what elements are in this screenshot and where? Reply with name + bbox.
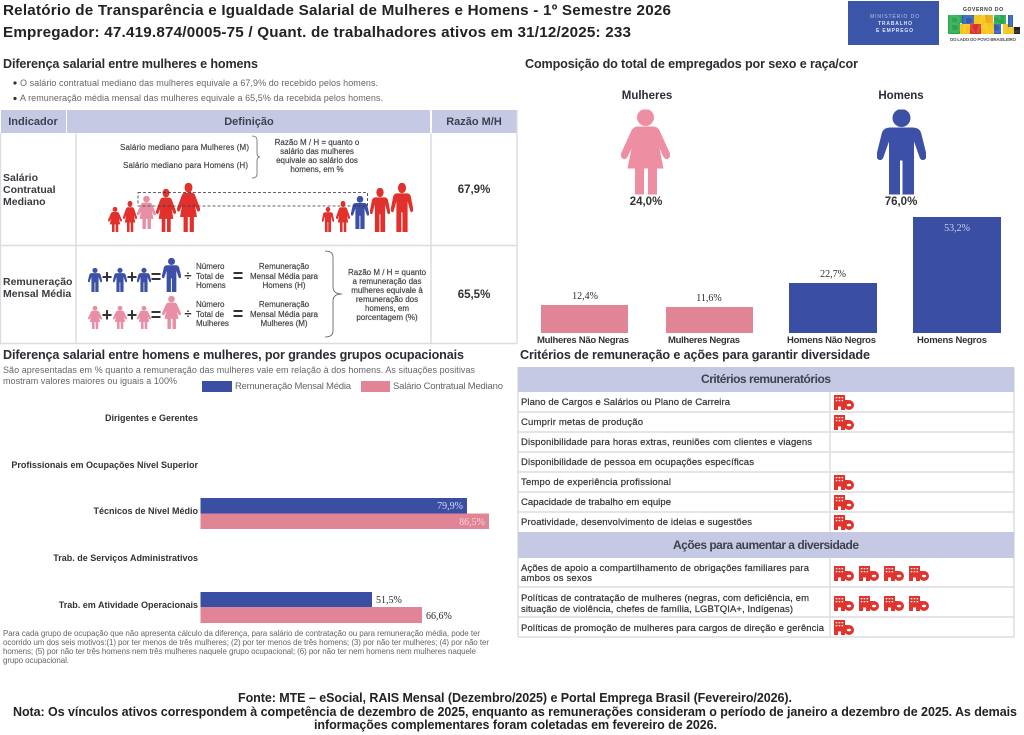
row label: remuneração mensal média: Mensal Média — [3, 288, 71, 300]
bar: homens não negros: 22,7% — [820, 269, 846, 280]
formula: men: Número — [196, 262, 225, 271]
formula: women: Mulheres (M) — [260, 319, 308, 328]
logo: Ministério do Trabalho e Emprego: TRABALHO — [878, 21, 912, 27]
row: proatividade — [521, 515, 854, 530]
row: contratação: situação de violência, chefes de família, LGBTQIA+, Indígenas) — [521, 604, 793, 615]
section header: critérios remuneratórios: Critérios remuneratórios — [701, 372, 831, 386]
formula: men: = — [151, 267, 161, 287]
footer: fonte e nota: informações complementares foram coletadas em fevereiro de 2026. — [314, 718, 717, 732]
logo: Ministério do Trabalho e Emprego: E EMPREGO — [876, 28, 913, 34]
footnote: homens; (5) por não ter três homens nem três mulheres naquele grupo ocupacional; (6) por não ter nem homens nem mulheres naquele — [3, 647, 477, 656]
row: metas — [521, 415, 854, 430]
formula: men: Homens — [196, 281, 226, 290]
definition text: salário mediano: Salário mediano para Homens (H) — [123, 161, 248, 170]
section header: critérios remuneratórios — [518, 367, 1014, 392]
definition text: salário mediano: Salário mediano para Mulheres (M) — [120, 143, 249, 152]
bracket and ratio definition: mulheres equivale à — [351, 286, 423, 295]
formula: men: Remuneração — [259, 262, 310, 271]
heading: composição: Composição do total de empregados por sexo e raça/cor — [525, 57, 858, 71]
heading: diferença salarial: Diferença salarial entre mulheres e homens — [3, 57, 258, 71]
pictogram: homens 76,0%: Homens — [878, 90, 924, 102]
formula: men: Mensal Média para — [250, 272, 319, 281]
bars: técnicos de nível médio: 86,5% — [459, 517, 485, 528]
bars: técnicos de nível médio: Técnicos de Nível Médio — [93, 506, 198, 516]
formula: women: Remuneração — [259, 300, 310, 309]
formula: men: ÷ — [184, 268, 192, 283]
logo: Governo do Brasil: GOVERNO DO — [963, 7, 1003, 13]
row label: salário contratual mediano: Salário — [3, 172, 38, 184]
legend: Remuneração Mensal Média — [235, 381, 352, 392]
row: obrigações familiares — [521, 563, 929, 584]
row label: salário contratual mediano: Mediano — [3, 196, 46, 208]
value: 67,9%: 67,9% — [458, 184, 490, 196]
bar: mulheres negras: Mulheres Negras — [668, 335, 740, 346]
bracket and ratio definition — [325, 251, 427, 337]
row: experiência — [521, 475, 854, 490]
text block: bullet points — [13, 78, 383, 103]
row: ocupações específicas: Disponibilidade de pessoa em ocupações específicas — [521, 457, 754, 468]
bar: homens negros: Homens Negros — [917, 335, 987, 346]
bracket and ratio definition: homens, em — [365, 304, 409, 313]
text block: chart description: São apresentadas em % quanto a remuneração das mulheres vale em relação à dos homens. As situações positivas — [3, 365, 476, 375]
bracket and ratio definition: porcentagem (%) — [356, 313, 418, 322]
row: obrigações familiares: Ações de apoio a compartilhamento de obrigações familiares para — [521, 563, 810, 574]
bar: homens negros: 53,2% — [944, 223, 970, 234]
footer: fonte e nota: Nota: Os vínculos ativos correspondem à competência de dezembro de 2025, enquanto as remunerações consideram o período de janeiro a dezembro de 2025. As demais — [13, 705, 1017, 719]
panel: indicator table — [0, 110, 517, 344]
table header: Razão M/H — [446, 116, 502, 128]
formula: men: + — [127, 267, 137, 287]
formula: men: = — [233, 266, 243, 286]
footnote: Para cada grupo de ocupação que não apresenta cálculo da diferença, para salário de contratação ou para remuneração média, pode ter — [3, 629, 480, 638]
row label: salário contratual mediano: Contratual — [3, 184, 56, 196]
heading: diferença por grupos ocupacionais: Diferença salarial entre homens e mulheres, por grandes grupos ocupacionais — [3, 348, 464, 362]
row: contratação — [521, 593, 929, 615]
row: promoção — [521, 620, 854, 635]
heading: critérios de remuneração: Critérios de remuneração e ações para garantir diversidade — [520, 348, 870, 362]
definition text: salário mediano: Razão M / H = quanto o — [275, 138, 360, 147]
bar: homens não negros: Homens Não Negros — [787, 335, 876, 346]
value: 65,5%: 65,5% — [458, 289, 490, 301]
bracket and ratio definition: remuneração dos — [356, 295, 418, 304]
formula: men — [88, 258, 319, 292]
formula: women: = — [233, 304, 243, 324]
legend: Salário Contratual Mediano — [393, 381, 503, 392]
logo: Ministério do Trabalho e Emprego — [848, 1, 939, 45]
formula: women: ÷ — [184, 306, 192, 321]
title: report heading: Relatório de Transparência e Igualdade Salarial de Mulheres e Homens - 1º Semestre 2026 — [3, 2, 671, 19]
row: contratação: Políticas de contratação de mulheres (negras, com deficiência, em — [521, 593, 809, 604]
formula: women: Número — [196, 300, 225, 309]
title: report heading: Empregador: 47.419.874/0005-75 / Quant. de trabalhadores ativos em 31/12/2025: 233 — [3, 24, 631, 41]
table header: Definição — [224, 116, 274, 128]
pictogram: mulheres 24,0% — [621, 90, 672, 208]
bracket and ratio definition: a remuneração das — [353, 277, 421, 286]
row label: remuneração mensal média: Remuneração — [3, 276, 72, 288]
row: proatividade: Proatividade, desenvolvimento de ideias e sugestões — [521, 517, 752, 528]
row: plano de cargos: Plano de Cargos e Salários ou Plano de Carreira — [521, 397, 731, 408]
table header — [1, 110, 517, 133]
formula: women: Mulheres — [196, 319, 229, 328]
formula: women — [88, 296, 319, 329]
formula: men: + — [102, 267, 112, 287]
row: equipe — [521, 495, 854, 510]
bars: atividade operacionais: Trab. em Atividade Operacionais — [59, 600, 198, 610]
bar: mulheres não negras — [537, 291, 629, 346]
section header: ações para diversidade: Ações para aumentar a diversidade — [673, 538, 859, 552]
legend — [202, 381, 503, 392]
icon group: families with median highlighted — [108, 183, 413, 232]
footnote: grupo ocupacional. — [3, 656, 69, 665]
definition text: salário mediano: homens, em % — [290, 165, 344, 174]
logo: Ministério do Trabalho e Emprego: MINISTÉRIO DO — [870, 13, 919, 20]
logo: Governo do Brasil: DO LADO DO POVO BRASILEIRO — [950, 37, 1016, 42]
row: metas: Cumprir metas de produção — [521, 417, 643, 428]
bar: homens negros — [913, 217, 1001, 346]
label: profissionais: Profissionais em Ocupações Nível Superior — [11, 460, 198, 470]
bracket and ratio definition: Razão M / H = quanto — [348, 268, 427, 277]
panel: criteria table — [518, 367, 1014, 637]
table header: Indicador — [8, 116, 58, 128]
pictogram: homens 76,0% — [876, 90, 927, 208]
row label: remuneração mensal média — [3, 276, 72, 300]
bars: técnicos de nível médio — [93, 498, 489, 529]
pictogram: homens 76,0%: 76,0% — [885, 196, 917, 208]
title: report heading — [3, 2, 671, 41]
bar: mulheres não negras: Mulheres Não Negras — [537, 335, 629, 346]
definition text: salário mediano: equivale ao salário dos — [276, 156, 358, 165]
bars: atividade operacionais: 66,6% — [426, 611, 452, 622]
label: dirigentes: Dirigentes e Gerentes — [105, 413, 198, 423]
footer: fonte e nota: Fonte: MTE – eSocial, RAIS Mensal (Dezembro/2025) e Portal Emprega Brasil (Fevereiro/2026). — [238, 691, 792, 705]
row: plano de cargos — [521, 395, 854, 410]
row: obrigações familiares: ambos os sexos — [521, 573, 592, 584]
footnote — [3, 629, 489, 665]
bar: mulheres negras — [666, 293, 753, 346]
row: equipe: Capacidade de trabalho em equipe — [521, 497, 671, 508]
formula: men: Total de — [196, 272, 225, 281]
formula: women: = — [151, 305, 161, 325]
text block: chart description: mostram valores maiores ou iguais a 100% — [3, 376, 177, 386]
definition text: salário mediano: salário das mulheres — [280, 147, 354, 156]
formula: women: + — [102, 305, 112, 325]
pictogram: mulheres 24,0%: 24,0% — [630, 196, 662, 208]
bar: mulheres negras: 11,6% — [696, 293, 722, 304]
bar chart: composição por raça/cor — [537, 217, 1001, 346]
bars: atividade operacionais — [59, 592, 452, 623]
pictogram: mulheres 24,0%: Mulheres — [622, 90, 672, 102]
text block: bullet points: O salário contratual mediano das mulheres equivale a 67,9% do recebido pelos homens. — [20, 78, 378, 88]
row label: salário contratual mediano — [3, 172, 56, 208]
text block: bullet points: A remuneração média mensal das mulheres equivale a 65,5% da recebida pelos homens. — [20, 93, 383, 103]
text block: chart description — [3, 365, 476, 386]
row: experiência: Tempo de experiência profissional — [521, 477, 671, 488]
section header: ações para diversidade — [518, 532, 1014, 558]
bars: técnicos de nível médio: 79,9% — [437, 501, 463, 512]
formula: women: + — [127, 305, 137, 325]
row: horas extras: Disponibilidade para horas extras, reuniões com clientes e viagens — [521, 437, 812, 448]
formula: women: Total de — [196, 310, 225, 319]
footnote: ocorrido um dos seis motivos:(1) por ter menos de três mulheres; (2) por ter menos de três homens; (3) por não ter mulheres; (4) por não ter — [3, 638, 489, 647]
footer: fonte e nota — [13, 691, 1017, 732]
bar: mulheres não negras: 12,4% — [572, 291, 598, 302]
row: promoção: Políticas de promoção de mulheres para cargos de direção e gerência — [521, 623, 825, 634]
formula: men: Homens (H) — [262, 281, 306, 290]
formula: women: Mensal Média para — [250, 310, 319, 319]
bars: atividade operacionais: 51,5% — [376, 595, 402, 606]
label: serviços administrativos: Trab. de Serviços Administrativos — [53, 553, 198, 563]
bar: homens não negros — [787, 269, 877, 346]
bar chart: grupos ocupacionais — [11, 413, 489, 623]
definition text: salário mediano — [120, 136, 360, 178]
